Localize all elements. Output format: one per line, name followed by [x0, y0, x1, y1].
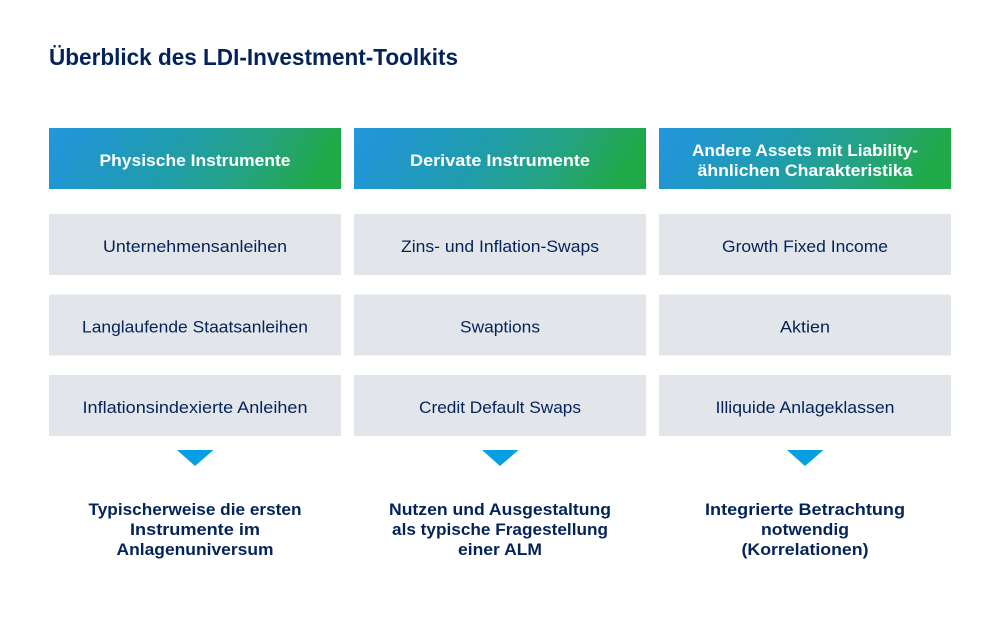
conclusion text	[389, 500, 611, 559]
item: Langlaufende Staatsanleihen	[49, 294, 341, 356]
item: Swaptions	[354, 294, 646, 356]
item: Zins- und Inflation-Swaps	[354, 214, 646, 275]
conclusion text: notwendig	[761, 520, 849, 539]
arrow: down	[482, 450, 518, 466]
conclusion text	[88, 500, 302, 559]
title: Überblick des LDI-Investment-Toolkits	[49, 44, 458, 70]
item: Illiquide Anlageklassen: Illiquide Anlageklassen	[716, 398, 894, 417]
item: Aktien: Aktien	[780, 318, 830, 336]
conclusion text	[705, 500, 905, 559]
header: Andere Assets mit Liability-ähnlichen Charakteristika: ähnlichen Charakteristika	[698, 161, 913, 180]
conclusion text: Instrumente im	[130, 520, 260, 539]
panel: Derivate Instrumente	[354, 128, 646, 559]
item: Inflationsindexierte Anleihen: Inflationsindexierte Anleihen	[82, 398, 308, 417]
conclusion text: einer ALM	[458, 540, 542, 559]
item: Credit Default Swaps	[354, 375, 646, 436]
item: Swaptions: Swaptions	[460, 318, 540, 336]
header: Physische Instrumente: Physische Instrumente	[100, 151, 290, 170]
item: Aktien	[659, 294, 951, 356]
conclusion text: als typische Fragestellung	[392, 520, 608, 539]
item: Growth Fixed Income	[659, 214, 951, 275]
panel: Physische Instrumente	[49, 128, 341, 559]
item: Growth Fixed Income: Growth Fixed Income	[722, 237, 888, 256]
header: Physische Instrumente	[49, 128, 341, 189]
item: Langlaufende Staatsanleihen: Langlaufende Staatsanleihen	[82, 318, 308, 336]
item: Illiquide Anlageklassen	[659, 375, 951, 436]
item: Inflationsindexierte Anleihen	[49, 375, 341, 436]
item: Unternehmensanleihen: Unternehmensanleihen	[103, 237, 287, 256]
header: Derivate Instrumente: Derivate Instrumente	[410, 151, 590, 170]
item: Unternehmensanleihen	[49, 214, 341, 275]
header: Derivate Instrumente	[354, 128, 646, 189]
header: Andere Assets mit Liability-ähnlichen Charakteristika: Andere Assets mit Liability-	[692, 141, 918, 160]
item: Zins- und Inflation-Swaps: Zins- und Inflation-Swaps	[401, 237, 599, 256]
conclusion text: Typischerweise die ersten	[88, 500, 302, 519]
conclusion text: (Korrelationen)	[742, 540, 868, 559]
conclusion text: Integrierte Betrachtung	[705, 500, 905, 519]
panel: Andere Assets	[659, 128, 951, 559]
item: Credit Default Swaps: Credit Default Swaps	[419, 398, 581, 417]
conclusion text: Nutzen und Ausgestaltung	[389, 500, 611, 519]
conclusion text: Anlagenuniversum	[116, 540, 274, 559]
header: Andere Assets mit Liability-ähnlichen Charakteristika	[659, 128, 951, 189]
arrow: down	[787, 450, 824, 466]
arrow: down	[177, 450, 214, 466]
